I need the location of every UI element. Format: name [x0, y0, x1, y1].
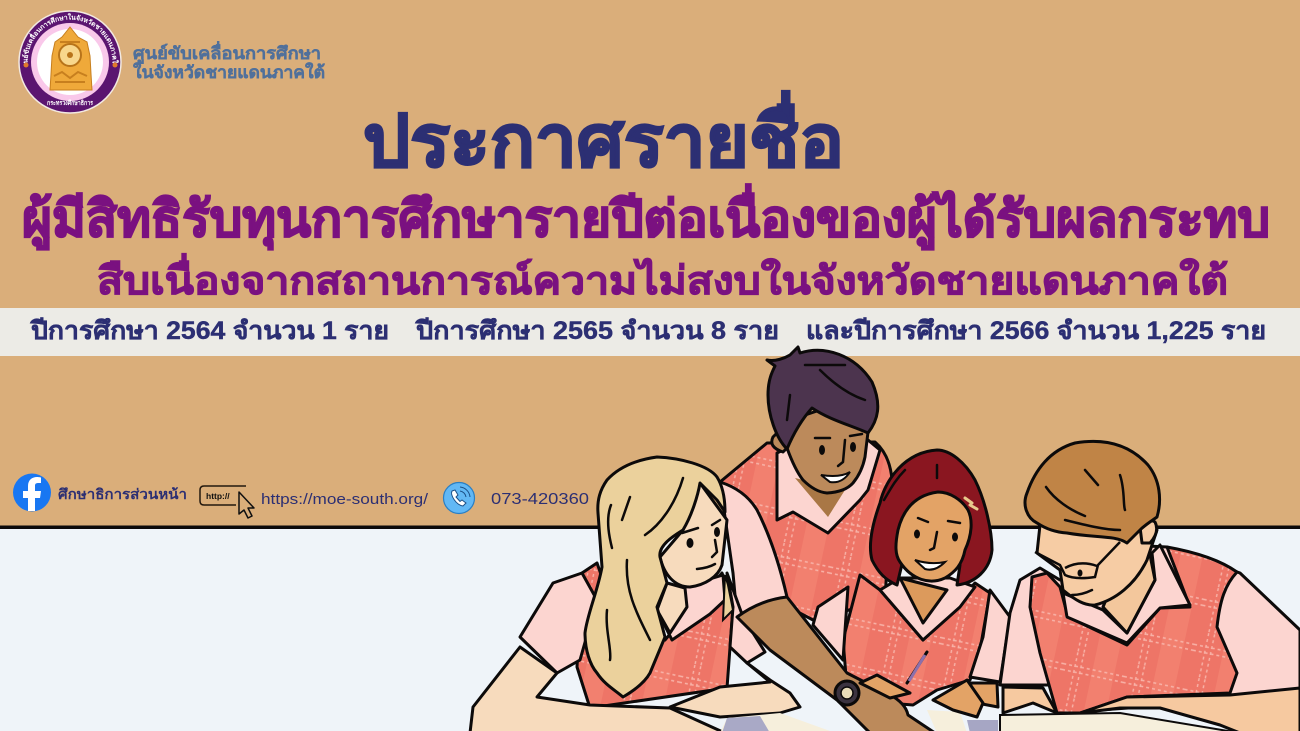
hand of girl with red hair [933, 680, 998, 717]
pen [907, 652, 927, 683]
facebook page name: ศึกษาธิการส่วนหน้า [58, 486, 187, 502]
illustration: four students studying [470, 347, 1300, 731]
organisation name: ในจังหวัดชายแดนภาคใต้ [133, 62, 325, 82]
student: blonde girl [470, 457, 800, 731]
main title: ประกาศรายชื่อ [363, 90, 844, 182]
logo [18, 10, 122, 114]
student: boy with dark hair [720, 347, 892, 620]
divider line [0, 526, 1300, 529]
lower background [0, 529, 1300, 731]
recipients by year [29, 317, 1266, 345]
recipients by year: ปีการศึกษา 2565 จำนวน 8 ราย [414, 317, 779, 345]
logo: กระทรวงศึกษาธิการ [47, 99, 93, 107]
phone number: 073-420360 [491, 491, 589, 508]
recipients by year: และปีการศึกษา 2566 จำนวน 1,225 ราย [806, 317, 1266, 345]
organisation name: ศูนย์ขับเคลื่อนการศึกษา [133, 41, 321, 65]
dark boy arm with watch [737, 597, 935, 731]
icon: phone [444, 482, 474, 514]
forearms of boy with glasses [1003, 687, 1300, 731]
icon: http link with cursor: http:// [206, 491, 230, 501]
info band [0, 308, 1300, 356]
student: girl with red hair [813, 450, 1010, 705]
open books [720, 710, 1240, 731]
pen barrel [909, 655, 925, 681]
organisation name [133, 41, 325, 82]
top background [0, 0, 1300, 526]
icon: http link with cursor [200, 486, 254, 518]
icon: facebook [13, 474, 51, 512]
subtitle line 2: สืบเนื่องจากสถานการณ์ความไม่สงบในจังหวัดชายแดนภาคใต้ [97, 253, 1228, 303]
subtitle line 1: ผู้มีสิทธิรับทุนการศึกษารายปีต่อเนื่องของผู้ได้รับผลกระทบ [22, 184, 1270, 250]
website url: https://moe-south.org/ [261, 491, 429, 508]
recipients by year: ปีการศึกษา 2564 จำนวน 1 ราย [29, 317, 389, 345]
logo emblem [50, 27, 92, 90]
student: boy with glasses [1000, 441, 1300, 713]
